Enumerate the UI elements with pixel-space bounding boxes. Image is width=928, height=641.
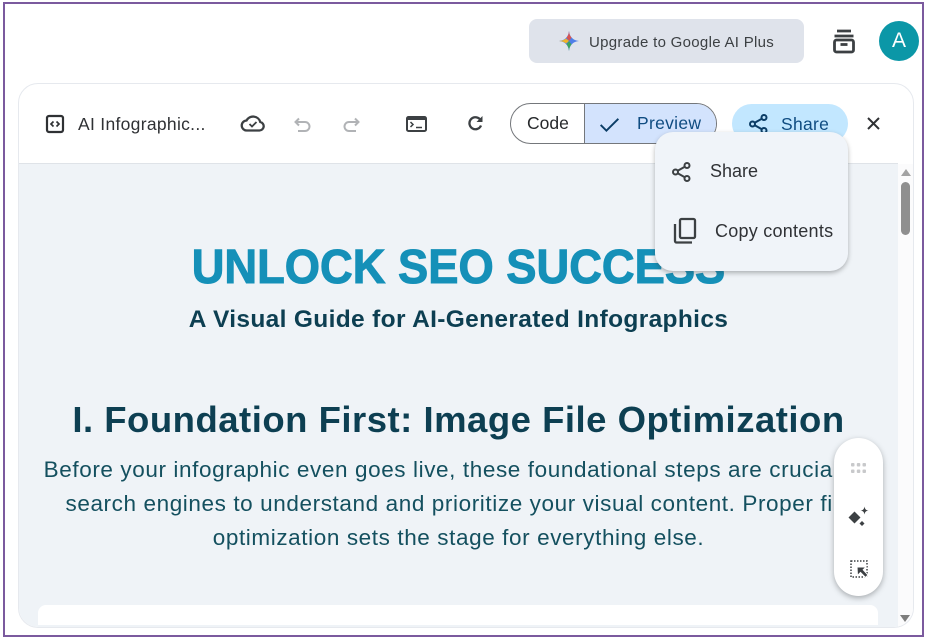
avatar: A [892,29,906,52]
toggle preview segment [584,104,717,143]
icon: close [867,117,880,130]
icon: select arrow [850,560,868,578]
scrollbar [898,164,913,627]
icon: undo [294,118,310,132]
icon: cloud saved [240,115,265,132]
section heading: I. Foundation First: Image File Optimization [72,399,845,440]
panel: preview content [19,163,898,628]
content card top [38,605,878,625]
icon: share [672,162,690,182]
share label: Share [781,114,829,134]
subtitle: A Visual Guide for AI-Generated Infographics [189,306,728,333]
scroll up arrow [901,169,911,176]
menu item: share: Share [710,161,758,181]
icon: check [600,118,619,132]
scroll thumb [901,182,910,235]
body text: Before your infographic even goes live, these foundational steps are crucial for [44,457,873,482]
share menu popup [655,132,848,271]
toggle: code / preview [510,103,717,144]
scroll down arrow [900,615,910,622]
preview label: Preview [637,113,701,133]
floating toolbar [834,438,883,596]
document title: AI Infographic... [78,114,206,134]
icon: code file [46,114,64,134]
body text [44,457,873,550]
icon: share [749,114,768,132]
upgrade button [529,19,804,63]
menu item: copy contents: Copy contents [715,221,833,241]
upgrade label: Upgrade to Google AI Plus [589,34,774,51]
share button [732,104,848,143]
icon: drag handle [851,463,866,473]
icon: archive stack [833,30,855,54]
icon: copy [674,218,696,244]
icon: refresh [468,116,482,130]
code label: Code [527,113,569,133]
icon: sparkle diamonds [848,506,868,526]
body text: search engines to understand and prioritize your visual content. Proper file [65,491,852,516]
icon: terminal [406,116,427,132]
avatar [879,21,919,61]
icon: gemini spark [559,31,579,51]
title: UNLOCK SEO SUCCESS [192,239,725,294]
icon: redo [344,118,360,132]
body text: optimization sets the stage for everything else. [213,525,704,550]
